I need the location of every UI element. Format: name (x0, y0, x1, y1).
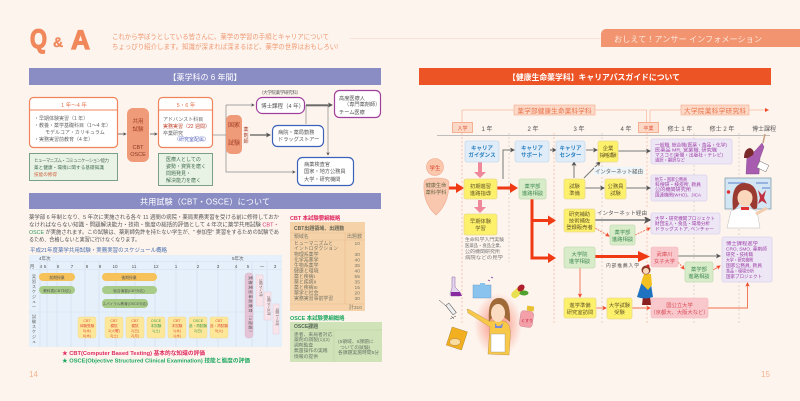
career boxes: green consultations (519, 179, 713, 282)
career boxes: yellow steps: 採用試験 (600, 151, 617, 159)
career boxes: yellow steps: 受験 (614, 308, 625, 316)
timeline header: 4 年 (620, 125, 632, 133)
table: OSCE outline: 調剤監査 (294, 342, 313, 348)
row labels: 7 (71, 264, 74, 269)
page header: Q & A logo: A (71, 25, 90, 55)
career boxes: blue guidance: サポート (521, 151, 543, 159)
timeline header: 卒業 (643, 125, 654, 132)
chart: schedule table: 習 (32, 279, 36, 285)
flow: CBT OSCE pill: OSCE (130, 152, 146, 158)
row labels: 9 (99, 264, 102, 269)
chart: schedule table: 1(土) (152, 328, 160, 333)
heading: career path guide: 【健康生命薬学科】キャリアパスガイドについて (508, 72, 680, 82)
career boxes: yellow steps: 企業 (603, 144, 614, 152)
career boxes: yellow steps (464, 141, 632, 319)
heading: six years of pharmacy: 【薬学科の 6 年間】 (169, 72, 241, 82)
schedule bars: 前期授業 (49, 275, 65, 280)
row labels: 4 (235, 264, 238, 269)
flow: skills green box: 薬と健康・環境に関する基礎知識 (34, 164, 104, 171)
chart: schedule table: 3(土) (110, 333, 118, 338)
career boxes: green consultations: 進路相談 (612, 235, 634, 243)
illustration: woman presenter with medicine icons (439, 277, 534, 357)
illustration: girl in blue skirt (637, 264, 653, 305)
table: CBT outline: 35 (355, 280, 360, 286)
table: CBT outline: 化学系薬学 (294, 256, 319, 264)
row labels: 6 (57, 264, 60, 269)
text block: early experience places (465, 236, 504, 261)
heading: CBT OSCE (29, 193, 381, 209)
icon: capsules (510, 283, 528, 300)
career boxes: purple destinations: 国家公務員, 教員 (726, 262, 762, 269)
label: pharmacist: 師 (243, 138, 249, 145)
career boxes: blue guidance: キャリア (471, 145, 493, 152)
row labels (30, 264, 277, 270)
career: doctoral course: 博士課程（4 年） (261, 102, 304, 110)
timeline header (437, 105, 776, 325)
legend: CBT and OSCE: ★ OSCE(Objective Structured Clinical Examination) 技能と態度の評価 (62, 356, 250, 364)
flow: year 5 to 6 box: アドバンスト科目 (163, 116, 203, 123)
chart: schedule table: 2(日) (131, 329, 139, 333)
career boxes: pink universities: （京都大、大阪大など） (650, 308, 709, 316)
chart: schedule table: 4年次 (39, 255, 51, 262)
career boxes: purple destinations: ドラッグストア, ベンチャー (655, 226, 714, 232)
arrows: grey flow (503, 150, 720, 256)
flow: skills green box: 技能の修得 (34, 171, 57, 178)
flow: professional skills green box: 医療人としての (166, 156, 201, 163)
page number 14: 14 (29, 370, 38, 379)
icon: medicine packet (446, 327, 467, 350)
schedule bars: 3期 1〜3月 (275, 308, 280, 326)
chart: schedule table: 本試験 (151, 323, 162, 328)
career boxes: purple destinations: 公的機関研究所 (655, 186, 691, 193)
career boxes: green consultations: 薬学部 (615, 228, 631, 236)
table: OSCE outline: ついての試験) (340, 344, 371, 351)
text block: early experience places: 公的機関研究所 (465, 248, 500, 255)
icon: student figure: 健康生命 (426, 181, 447, 189)
row labels: 5 (247, 264, 250, 269)
schedule bars: 2期 9〜11月 (266, 296, 272, 316)
table: OSCE outline: 情報の提供 (294, 353, 318, 360)
career boxes: blue guidance (465, 141, 585, 162)
flow: national exam pill: 試験 (228, 139, 240, 147)
career boxes: yellow steps: 技術補佐 (569, 216, 591, 224)
career boxes: purple destinations: マスコミ(新聞・出版社・テレビ) (655, 152, 723, 158)
career boxes: yellow steps: 早期体験 (470, 217, 492, 225)
table: OSCE outline: OSCE課題 (294, 323, 318, 330)
chart: schedule table: 模試 (110, 323, 118, 328)
flow: year 1 to 4 box: モデルコア・カリキュラム (45, 129, 105, 136)
timeline header: 修士 2 年 (710, 125, 734, 133)
table: OSCE outline: 患者、来局者対応 (294, 331, 333, 338)
flow: year 5 to 6 box: 卒業研究 (163, 130, 183, 137)
table: CBT outline: 生物系薬学 (294, 262, 319, 269)
chart: schedule table: 追・再試験 (210, 323, 228, 328)
chart: schedule table: ュ (32, 339, 36, 344)
career boxes: purple destinations: 食品・環境分析 (726, 268, 754, 274)
schedule bars: 教科書(CBT対応) (43, 288, 71, 293)
flow: CBT OSCE pill: 共用 (132, 117, 144, 125)
icon: student figure (424, 158, 449, 215)
timeline header: 大学院薬科学研究科 (684, 106, 746, 115)
table: OSCE outline: 無菌操作の実践 (294, 347, 328, 354)
career boxes: purple destinations: 通訳・翻訳など (655, 156, 685, 164)
career boxes: purple destinations (651, 139, 772, 282)
heading: career path guide (419, 68, 771, 85)
career boxes: purple destinations: 地方・国家公務員 (655, 176, 687, 183)
chart: schedule table: 本試験 (172, 323, 183, 328)
arrow: pharmacist to hospital (250, 134, 270, 136)
table: CBT outline: 40 (355, 268, 360, 274)
career: advanced medical professional: （専門薬剤師） (344, 100, 380, 108)
career: advanced medical professional: 高度医療人 (339, 94, 366, 102)
chart: schedule table: CBT (110, 319, 118, 323)
career boxes: yellow steps: 公務員 (608, 182, 624, 190)
flow: connector lines to careers (213, 105, 328, 172)
chart: schedule table: 2(月) (131, 333, 139, 338)
chart: schedule table: CBT (83, 319, 91, 323)
flow: year 1 to 4 box (30, 98, 118, 148)
page number 15: 15 (761, 370, 770, 379)
row labels: 月 (30, 264, 34, 270)
row labels: 3 (217, 264, 220, 269)
career boxes: green consultations: 大学院 (572, 250, 588, 258)
labels: internet and internal recommendation (594, 167, 648, 269)
page header: intro text: これから学ぼうとしている皆さんに、薬学の学習の手順とキャリアについて (112, 32, 329, 41)
heading: CBT OSCE: 共用試験（CBT・OSCE）について (140, 198, 270, 206)
career boxes: purple destinations: 大学・研究機関プロジェクト (655, 215, 715, 222)
labels: internet and internal recommendation: インターネット経由 (595, 168, 643, 176)
icon: building (473, 277, 493, 298)
timeline header: 3 年 (573, 125, 585, 133)
illustration: woman with purple coat pointing (744, 134, 769, 174)
table: CBT outline: 薬と疾病I (294, 273, 315, 280)
text block: CBT OSCE description (29, 213, 280, 244)
table: CBT outline: CBT 本試験要綱概略 (290, 214, 341, 222)
career: government and research: 国家・地方公務員 (304, 167, 346, 175)
table: CBT outline: 10 (355, 241, 360, 247)
career: hospital and pharmacy (272, 126, 324, 146)
flow: year 1 to 4 box: ・早期体験実習（1 年） (34, 115, 88, 122)
table: CBT outline: 実務実習事前学習 (294, 295, 333, 302)
career boxes: yellow steps: 進路指導 (470, 189, 492, 197)
page header: intro text (112, 32, 338, 51)
chart: schedule table: 5年次 (232, 255, 244, 262)
flow: professional skills green box: 問題発見・ (166, 170, 191, 177)
flow: national exam pill: 国家 (228, 121, 240, 129)
career: doctoral course (256, 89, 304, 114)
career boxes: yellow steps: 登録販売者 (566, 223, 593, 231)
chart: schedule table: OSCE (193, 319, 204, 323)
chart: schedule table: CBT (173, 319, 181, 323)
icon: student figure: 学生 (429, 164, 441, 172)
flow: CBT OSCE pill: 試験 (132, 125, 144, 133)
chart: schedule table: 2(火曜) (108, 328, 120, 333)
career boxes: yellow steps: 試験 (569, 182, 580, 190)
labels: internet and internal recommendation: 内部推薦入学 (606, 262, 639, 269)
career boxes: blue guidance: センター (559, 151, 582, 159)
legend: CBT and OSCE (62, 349, 250, 364)
table: CBT outline: 薬学と社会 (294, 290, 319, 296)
flow: year 1 to 4 box: 1 年〜4 年 (61, 101, 87, 109)
table: CBT outline: 40 (355, 258, 360, 264)
career boxes: purple destinations: 医薬品 MR, 営業職, 研究職 (655, 146, 717, 154)
career boxes: purple destinations: CRO, SMO, 薬剤師 (726, 246, 767, 252)
career boxes: purple destinations: 一般職, 総合職(医薬・食品・化学) (655, 142, 727, 148)
career boxes: pink universities (650, 247, 709, 318)
table: CBT outline: 薬と疾病II (294, 278, 316, 286)
row labels: 8 (86, 264, 89, 269)
chart: schedule table: CBT (131, 319, 139, 323)
heading: six years of pharmacy (29, 68, 381, 85)
flow: CBT OSCE pill: CBT (132, 145, 144, 151)
row labels: 5 (44, 264, 47, 269)
table: OSCE outline: (5領域、6課題に (338, 338, 374, 345)
career: government and research (298, 158, 354, 186)
table: CBT outline: 30 (355, 252, 360, 258)
career boxes: blue guidance: キャリア (559, 145, 582, 152)
schedule bars: 実務実習事前教育（3週間） (248, 276, 253, 334)
career boxes: purple destinations: 研究・技術職 (726, 251, 753, 258)
table: CBT outline: ヒューマニズムと (294, 240, 333, 247)
career boxes: green consultations: 進学相談 (569, 257, 591, 265)
row labels: 2 (197, 264, 200, 269)
career boxes: purple destinations: 博士課程進学 (726, 240, 758, 247)
chart: schedule table: 実 (32, 273, 36, 280)
row labels: 12 (153, 264, 159, 269)
chart: schedule table: CBT (215, 319, 223, 323)
career boxes: yellow steps: 大学試験 (609, 301, 631, 309)
career boxes: purple destinations: 科捜研・検疫所, 教員 (655, 181, 701, 188)
flow: skills green box: ヒューマニズム・コミュニケーション能力 (34, 157, 109, 164)
chart: schedule table: 試 (32, 313, 37, 320)
table: CBT outline: CBT出題領域、出題数 (294, 225, 344, 232)
career boxes: yellow steps: 研究補助 (569, 210, 590, 218)
subheading: schedule title: 平成21年度薬学共用試験・実務実習のスケジュール概略 (30, 246, 167, 254)
table: OSCE outline (290, 314, 382, 362)
legend: CBT and OSCE: ★ CBT(Computer Based Testing) 基本的な知識の評価 (62, 349, 205, 357)
timeline header: 1 年 (481, 125, 493, 133)
table: CBT outline: 健康と環境 (294, 268, 319, 274)
timeline header: 博士課程 (752, 125, 776, 133)
career boxes: purple destinations: 財団法人・食品・環境分析 (655, 220, 710, 227)
table: OSCE outline: OSCE 本試験要綱概略 (290, 314, 345, 322)
chart: schedule table: ジ (32, 334, 36, 339)
chart: schedule table: ス (32, 284, 36, 289)
chart: schedule table: 6(木) (83, 333, 91, 338)
row labels: 11 (132, 264, 137, 269)
timeline header: 薬学部健康生命薬科学科 (518, 106, 592, 115)
career: advanced medical professional: チーム医療 (339, 108, 366, 116)
table: OSCE outline: 各課題実施時間5分 (338, 349, 379, 356)
schedule bars: 後期授業 (121, 275, 137, 280)
page header: intro text: ちょっぴり紹介します。知識が深まれば深まるほど、薬学の世界はおもしろい! (112, 42, 338, 51)
flow: year 5 to 6 box (158, 98, 212, 148)
flow: year 5 to 6 box: 実務実習（22 週間） (163, 123, 210, 130)
chart: schedule table: ケ (32, 288, 36, 294)
chart: schedule table: 追・再試験 (189, 323, 207, 328)
chart: schedule table: ー (32, 304, 36, 309)
chart: schedule table: ケ (32, 328, 36, 334)
table: CBT outline: 30 (355, 296, 360, 302)
table: CBT outline: 35 (355, 263, 360, 269)
career boxes: pink universities: 女子大学 (654, 257, 675, 265)
schedule bars: 1期 5〜7月 (258, 279, 264, 297)
career boxes: yellow steps: 研究室訪問 (567, 308, 593, 316)
career boxes: yellow steps: 学習 (475, 224, 486, 232)
career: hospital and pharmacy: 病院・薬局勤務 (278, 128, 315, 136)
text block: CBT OSCE description: 薬学部 6 年制となり、5 年次に実施される各々 11 週間の病院・薬局実務実習を受ける前に修得しておか (29, 213, 280, 221)
table: CBT outline: 15 (355, 285, 360, 291)
flow: professional skills green box: 解決能力を磨く (166, 177, 201, 184)
text block: early experience places: 生命科学入門実験 (465, 236, 504, 243)
career boxes: green consultations: 進路相談 (522, 189, 544, 197)
arrow: doctoral to advanced medicine (306, 104, 332, 106)
timeline header: 2 年 (527, 125, 539, 133)
row labels: 4 (40, 264, 43, 269)
chart: schedule table: 9(火) (215, 328, 223, 333)
career: government and research: 大学・研究機関 (304, 175, 340, 183)
page header: Q & A logo: Q (30, 24, 47, 54)
flow: skills green box (30, 154, 118, 180)
timeline header: 修士 1 年 (668, 125, 692, 133)
career boxes: yellow steps: 試験 (610, 189, 621, 197)
career boxes: purple destinations: 国家プロジェクト (726, 273, 762, 280)
label: pharmacist: 剤 (243, 132, 249, 139)
schedule bars: スパイラル教育(OSCE対応) (103, 301, 147, 306)
row labels: 10 (112, 264, 118, 269)
career: advanced medical professional (334, 90, 380, 118)
table: CBT outline: 物理系薬学 (294, 251, 319, 258)
career boxes: green consultations: 薬学部 (691, 265, 708, 273)
career: hospital and pharmacy: ドラッグストアー (278, 135, 319, 143)
table: CBT outline: 領域名 (294, 233, 309, 240)
chart: schedule table: 2(日) (194, 329, 202, 333)
chart: schedule table: 5(木) (83, 328, 91, 333)
career boxes: green consultations: 薬学部 (525, 182, 541, 190)
flow: year 1 to 4 box: ・教養・薬学基礎科目（1〜4 年） (34, 122, 111, 129)
page header: answer information tab (350, 29, 800, 47)
flow: professional skills green box (158, 154, 212, 186)
page header: answer information tab: おしえて！アンサー インフォメーション (614, 35, 762, 44)
chart: schedule table: 模試 (131, 323, 139, 328)
career boxes: blue guidance: キャリア (521, 145, 543, 152)
chart: schedule table: 1(水) (173, 333, 181, 338)
table: CBT outline (290, 214, 365, 311)
career boxes: purple destinations: 大学・研究機関 (726, 256, 753, 264)
labels: internet and internal recommendation: インターネット経由 (597, 209, 647, 217)
chart: schedule table: 1(水) (173, 328, 181, 333)
label: pharmacist (243, 126, 249, 145)
flow: year 5 to 6 box: 5・6 年 (177, 101, 196, 109)
arrows: thick red flow (449, 183, 650, 263)
icon: flask (450, 277, 462, 296)
table: CBT outline: 20 (355, 290, 360, 296)
chart: schedule table: ス (32, 324, 36, 329)
career: doctoral course: （大学院薬学研究科） (259, 89, 301, 96)
exam boxes (78, 317, 228, 338)
text block: early experience places: 医薬品・食品企業、 (465, 242, 504, 249)
timeline header: 入学 (457, 125, 468, 132)
table: CBT outline: 出題数 (347, 233, 362, 240)
career boxes: yellow steps: 初期進習 (470, 182, 491, 190)
flow: year 1 to 4 box: ・実務実習前教育（4 年） (34, 136, 93, 143)
table: CBT outline: 薬と疾病III (294, 284, 318, 291)
chart: schedule table: ュ (32, 299, 36, 304)
flow: professional skills green box: 姿勢・資質を磨く (166, 163, 206, 170)
row labels: 1 (175, 264, 178, 269)
career boxes: green consultations: 進路相談 (688, 272, 710, 280)
page header: Q & A logo (30, 24, 90, 55)
table: CBT outline: 計310 (349, 304, 362, 311)
illustration: doctor with board (725, 178, 771, 228)
table: CBT outline: 55 (355, 274, 360, 280)
schedule bars (39, 273, 280, 338)
career boxes: pink universities: 国公立大学 (666, 301, 693, 309)
text block: CBT OSCE description: るため、合格しないと実習に行けなくなります。 (29, 236, 140, 244)
arrows: thin red flow (580, 228, 748, 308)
chart: schedule table: ジ (32, 294, 36, 299)
flow: CBT OSCE pill (127, 108, 149, 162)
table: OSCE outline: 薬剤の調製(1)(2) (294, 336, 330, 343)
row labels: 一 (260, 264, 265, 269)
arrows: pink downward (474, 162, 486, 213)
text block: early experience places: 病院などの見学 (465, 254, 503, 261)
career boxes: yellow steps: 進学準備 (569, 301, 591, 309)
arrows: between year boxes (118, 133, 157, 135)
text block: CBT OSCE description: なければならない知識・問題解決能力・技術・態度の総括的評価として 4 年次に薬学共用試験 CBT・ (29, 220, 279, 228)
icon: syringe (439, 300, 456, 319)
flow: year 5 to 6 box: （研究室配属） (174, 136, 209, 143)
page header: Q & A logo: & (53, 34, 63, 50)
row labels: 3 (274, 264, 277, 269)
career boxes: purple destinations: 国連機関(WHO)、JICA (655, 192, 702, 198)
chart: schedule table (29, 255, 282, 347)
flow: national exam pill (226, 115, 242, 154)
schedule bars: 総合演習(CBT対応) (113, 288, 145, 293)
career boxes: yellow steps: 準備 (569, 189, 580, 197)
career: government and research: 病薬検査官 (304, 160, 330, 168)
chart: schedule table: 験 (32, 318, 37, 325)
label: pharmacist: 薬 (243, 126, 249, 133)
chart: schedule table: OSCE (151, 319, 162, 323)
icon: student figure: 薬科学科 (426, 188, 446, 196)
chart: schedule table: 体験受験 (80, 323, 95, 328)
table: CBT outline: イントロダクション (294, 245, 338, 252)
career boxes: blue guidance: ガイダンス (468, 151, 496, 159)
icon: medicine bottle: くすり (521, 317, 533, 323)
text block: CBT OSCE description: OSCE が実施されます。この試験は、薬剤師免許を持たない学生が、" 参加型" 実習をするための試験であ (29, 228, 279, 236)
career boxes: pink universities: 武庫川 (657, 250, 672, 258)
